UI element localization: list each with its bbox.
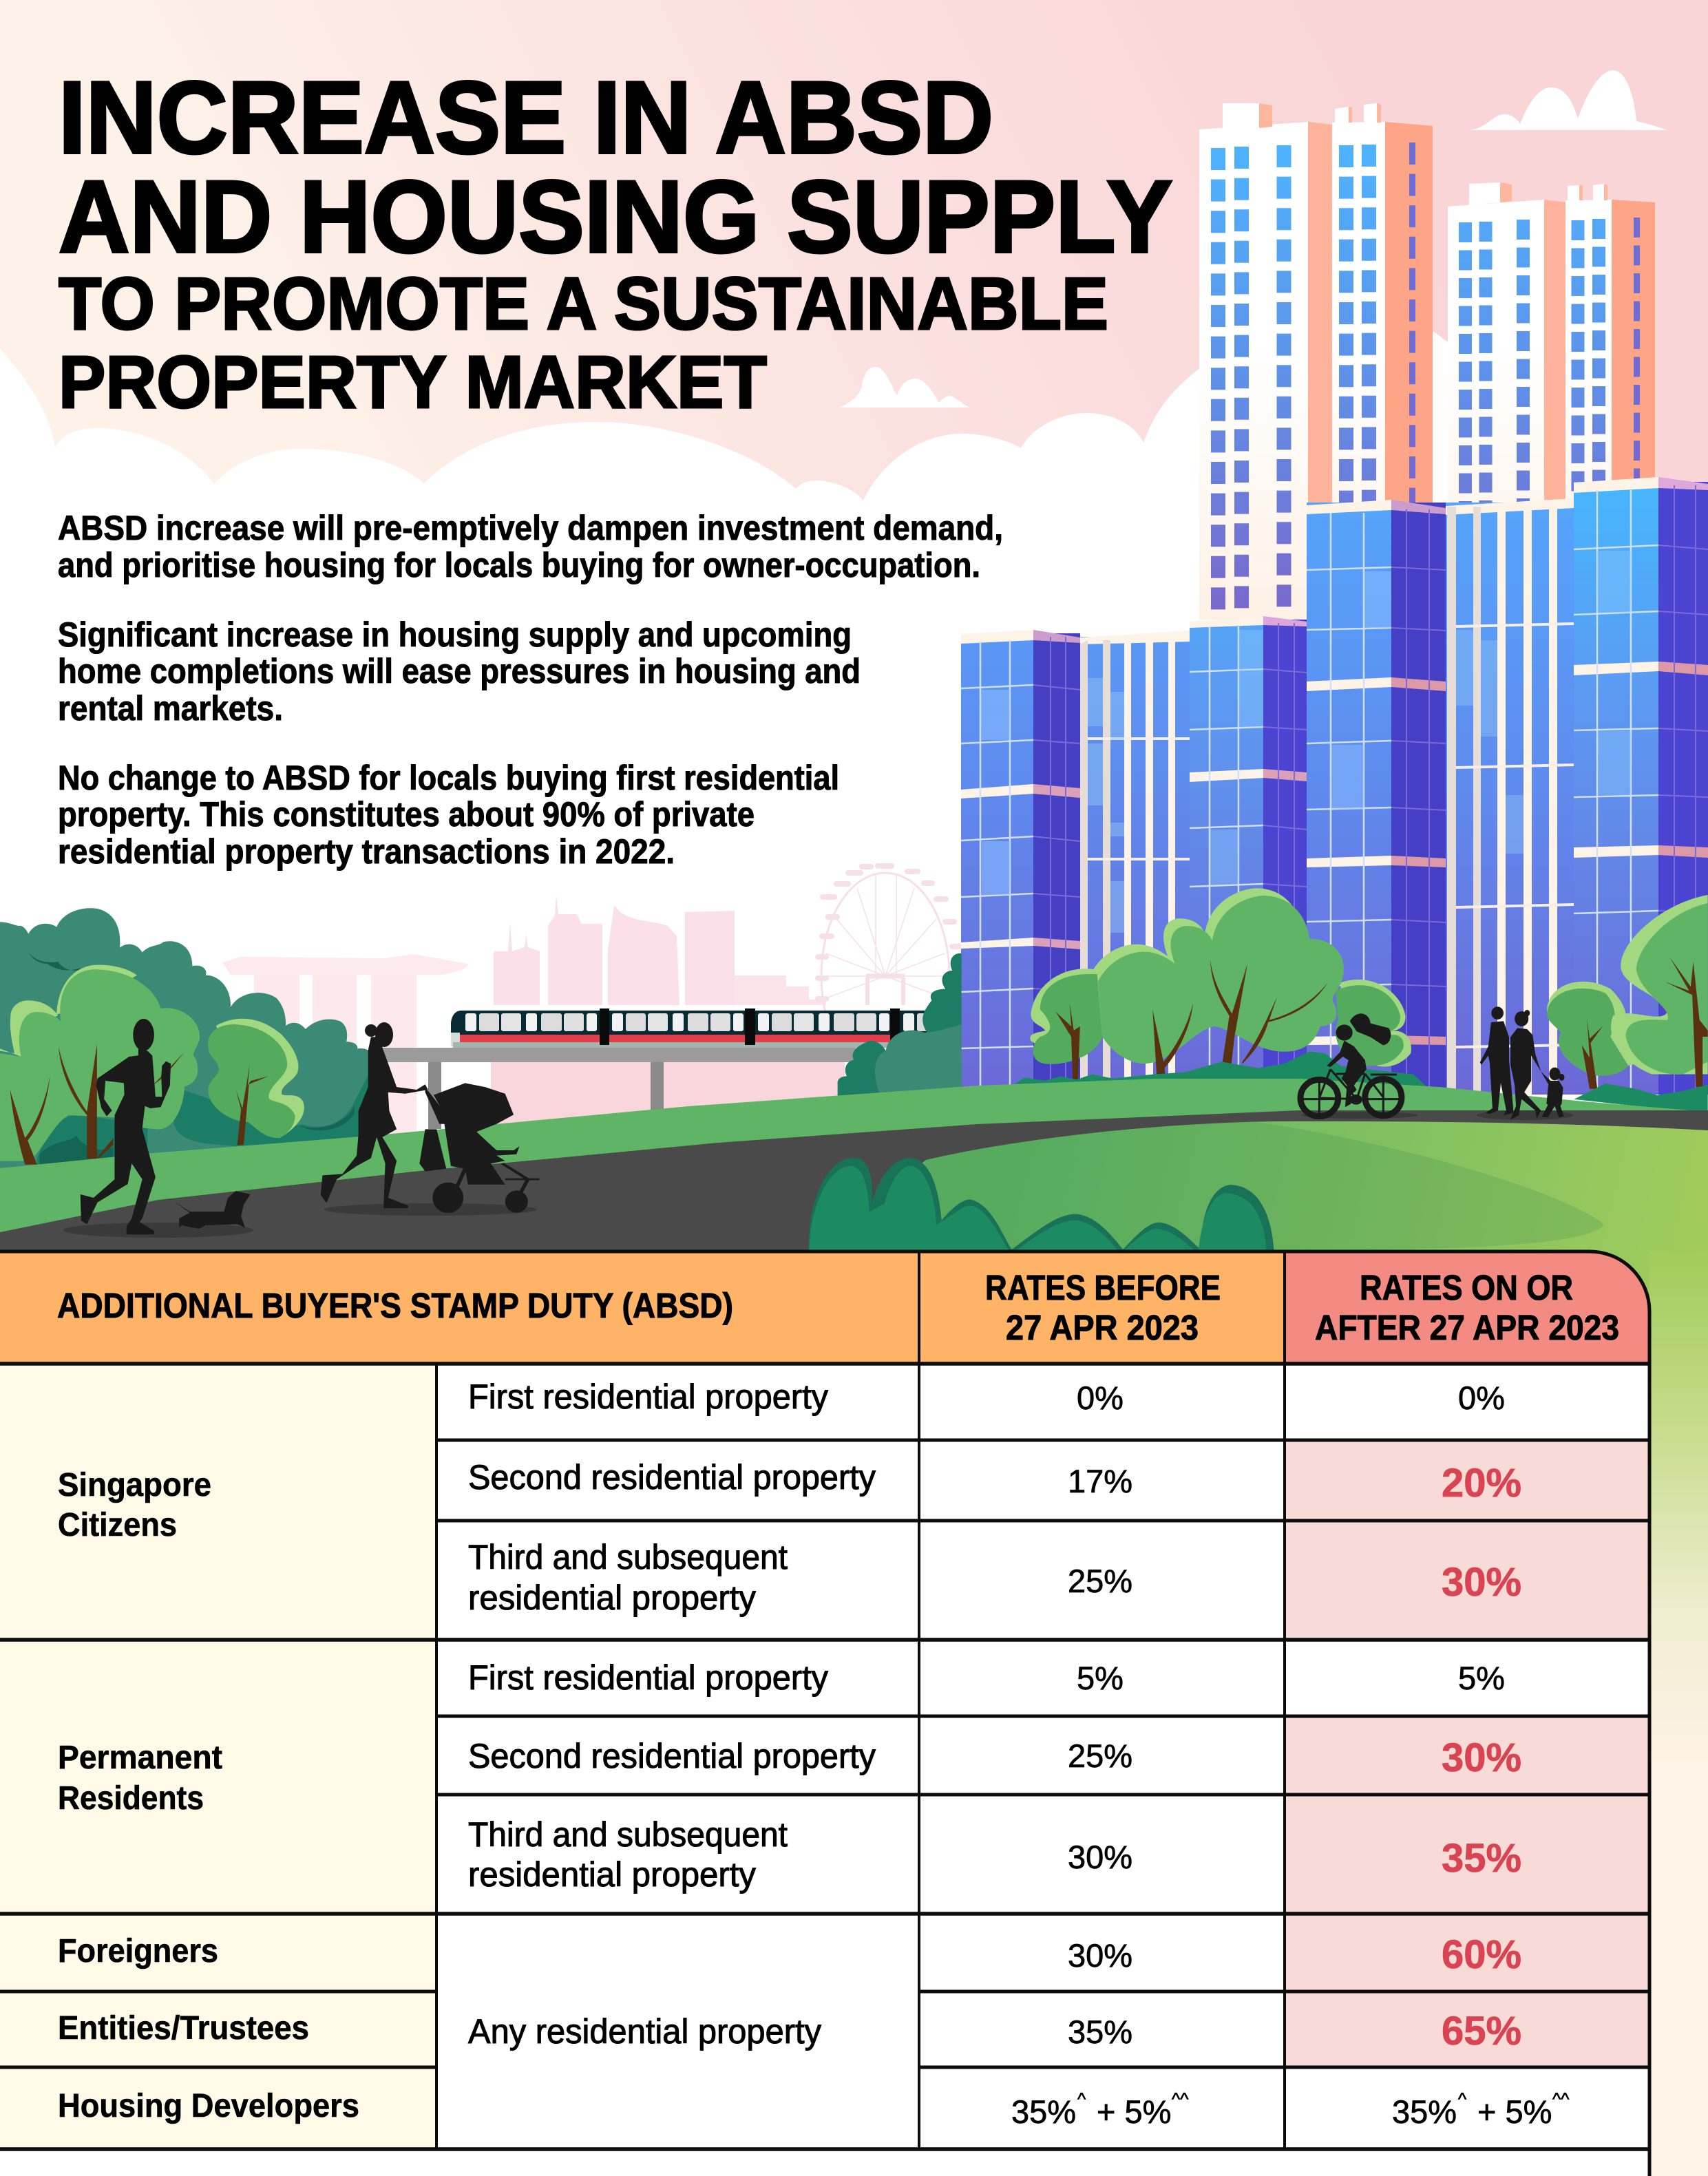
glass building 4 bbox=[1307, 500, 1446, 1095]
buyer categories: Entities/Trustees bbox=[58, 2010, 309, 2047]
table grid lines bbox=[0, 1251, 1649, 2176]
title: PROPERTY MARKET bbox=[59, 340, 767, 423]
stroller bbox=[434, 1083, 519, 1185]
rates on or after 27 Apr 2023: 30% bbox=[1442, 1735, 1521, 1780]
rates before 27 Apr 2023: 0% bbox=[1077, 1380, 1124, 1416]
title: INCREASE IN ABSD bbox=[59, 60, 993, 175]
rates before 27 Apr 2023 bbox=[1011, 1380, 1189, 2130]
rates on or after 27 Apr 2023: ^^ bbox=[1552, 2089, 1570, 2109]
rates on or after 27 Apr 2023: 35% bbox=[1442, 1836, 1521, 1881]
rates before 27 Apr 2023: 17% bbox=[1068, 1463, 1132, 1499]
rates on or after 27 Apr 2023: ^ bbox=[1458, 2089, 1467, 2109]
body text paragraphs: home completions will ease pressures in housing and bbox=[58, 652, 861, 690]
buyer categories bbox=[58, 1467, 359, 2124]
tree left small bbox=[208, 1019, 304, 1145]
low bushes on right hill bbox=[1004, 1051, 1708, 1114]
small cloud centre bbox=[839, 367, 970, 408]
rates before 27 Apr 2023: 25% bbox=[1068, 1563, 1132, 1599]
table header labels: 27 APR 2023 bbox=[1006, 1308, 1199, 1347]
rates on or after 27 Apr 2023: 30% bbox=[1442, 1560, 1521, 1605]
property types: Third and subsequent bbox=[468, 1815, 788, 1854]
body text paragraphs: Significant increase in housing supply and upcoming bbox=[58, 615, 852, 654]
table cell fills bbox=[0, 1251, 1649, 2176]
rates before 27 Apr 2023: 30% bbox=[1068, 1839, 1132, 1875]
rates on or after 27 Apr 2023 bbox=[1392, 1380, 1570, 2130]
buyer categories: Foreigners bbox=[58, 1933, 218, 1969]
glass building 1 bbox=[961, 630, 1080, 1095]
property types: First residential property bbox=[468, 1377, 828, 1416]
glass building 3 bbox=[1190, 616, 1307, 1095]
pink city skyline bbox=[222, 866, 960, 1136]
body text paragraphs: ABSD increase will pre-emptively dampen investment demand, bbox=[58, 509, 1003, 547]
buyer categories: Singapore bbox=[58, 1467, 211, 1503]
residential tower left bbox=[1199, 103, 1433, 620]
green hill bbox=[0, 1079, 1708, 1239]
large white cloud bank bbox=[0, 330, 1542, 525]
body text paragraphs: residential property transactions in 2022. bbox=[58, 832, 675, 871]
body text paragraphs: rental markets. bbox=[58, 689, 283, 728]
elevated track bbox=[381, 1048, 856, 1129]
title: AND HOUSING SUPPLY bbox=[59, 159, 1172, 274]
rates before 27 Apr 2023: 35% bbox=[1068, 2014, 1132, 2050]
glass building 5 stripes bbox=[1446, 498, 1575, 1095]
table header labels: RATES BEFORE bbox=[985, 1268, 1221, 1307]
property types: residential property bbox=[468, 1855, 756, 1894]
dog bbox=[174, 1191, 251, 1229]
property types: Second residential property bbox=[468, 1737, 876, 1775]
rates before 27 Apr 2023: ^^ bbox=[1172, 2089, 1189, 2109]
figure shadows bbox=[63, 1110, 1573, 1238]
bush right of train bbox=[838, 953, 962, 1106]
rates before 27 Apr 2023: 5% bbox=[1077, 1660, 1124, 1696]
rates before 27 Apr 2023: ^ bbox=[1077, 2089, 1086, 2109]
tree trunks bbox=[10, 1044, 184, 1165]
property types: residential property bbox=[468, 1578, 756, 1617]
buyer categories: Residents bbox=[58, 1780, 204, 1817]
dark bushes behind left trees bbox=[0, 908, 372, 1170]
rates on or after 27 Apr 2023: 35% bbox=[1392, 2093, 1457, 2130]
body text paragraphs: No change to ABSD for locals buying first residential bbox=[58, 759, 839, 797]
property types: Second residential property bbox=[468, 1458, 876, 1497]
residential tower right bbox=[1448, 182, 1655, 506]
property types bbox=[468, 1377, 876, 2051]
rates before 27 Apr 2023: + 5% bbox=[1097, 2093, 1171, 2130]
MRT train bbox=[451, 1008, 929, 1048]
rates on or after 27 Apr 2023: 5% bbox=[1458, 1660, 1505, 1696]
buyer categories: Housing Developers bbox=[58, 2088, 359, 2124]
ABSD table bbox=[0, 1251, 1649, 2176]
buyer categories: Citizens bbox=[58, 1507, 177, 1543]
table header labels: RATES ON OR bbox=[1360, 1268, 1573, 1307]
lawn shade bbox=[895, 1122, 1604, 1250]
table header labels bbox=[57, 1268, 1619, 1347]
rates before 27 Apr 2023: 30% bbox=[1068, 1937, 1132, 1974]
rates on or after 27 Apr 2023: 60% bbox=[1442, 1932, 1521, 1977]
small cloud upper right bbox=[1470, 70, 1667, 130]
rates on or after 27 Apr 2023: 65% bbox=[1442, 2009, 1521, 2053]
glass building 2 stripes bbox=[1080, 631, 1191, 1095]
rates on or after 27 Apr 2023: 0% bbox=[1458, 1380, 1505, 1416]
walking path bbox=[0, 1110, 1708, 1251]
rates before 27 Apr 2023: 25% bbox=[1068, 1737, 1132, 1774]
green lawn bbox=[888, 1121, 1708, 1308]
rates on or after 27 Apr 2023: 20% bbox=[1442, 1461, 1521, 1506]
property types: Any residential property bbox=[468, 2012, 821, 2051]
table header labels: ADDITIONAL BUYER'S STAMP DUTY (ABSD) bbox=[57, 1286, 733, 1325]
trees right cluster bbox=[1030, 888, 1708, 1089]
silhouette: runner and dog bbox=[81, 1019, 251, 1234]
rates before 27 Apr 2023: 35% bbox=[1011, 2093, 1076, 2130]
silhouette: woman with stroller bbox=[321, 1022, 539, 1213]
glass building 6 bbox=[1574, 477, 1708, 1095]
body text paragraphs bbox=[58, 509, 1003, 871]
buyer categories: Permanent bbox=[58, 1740, 222, 1776]
foreground bush bbox=[809, 1158, 1274, 1262]
silhouette: family bbox=[1480, 1006, 1565, 1120]
rates on or after 27 Apr 2023: + 5% bbox=[1477, 2093, 1552, 2130]
ferris wheel bbox=[818, 866, 960, 1079]
tree left big bbox=[0, 965, 200, 1165]
body text paragraphs: and prioritise housing for locals buying for owner-occupation. bbox=[58, 546, 980, 584]
property types: Third and subsequent bbox=[468, 1538, 788, 1576]
silhouette: cyclist bbox=[1300, 1013, 1402, 1117]
sky background bbox=[0, 0, 1708, 523]
body text paragraphs: property. This constitutes about 90% of private bbox=[58, 795, 755, 834]
title bbox=[59, 60, 1172, 423]
title: TO PROMOTE A SUSTAINABLE bbox=[59, 262, 1108, 345]
table header labels: AFTER 27 APR 2023 bbox=[1315, 1308, 1619, 1347]
property types: First residential property bbox=[468, 1658, 828, 1697]
right edge gradient strip bbox=[1649, 1251, 1708, 2176]
